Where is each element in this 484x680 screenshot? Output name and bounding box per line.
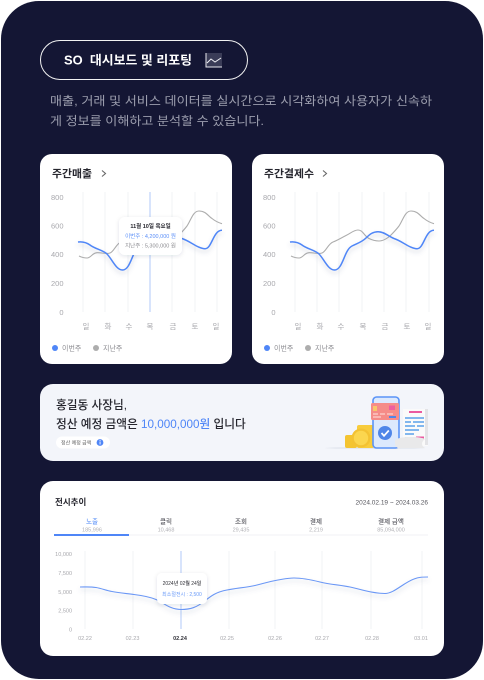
line chart: weekly sales: 토 (192, 322, 199, 331)
banner text: 정산 예정 금액은 10,000,000원 입니다 (56, 417, 246, 431)
line chart: weekly sales: 400 (51, 250, 64, 259)
line chart: weekly sales: 0 (59, 308, 64, 317)
line chart: weekly payments: 일 (295, 322, 302, 331)
metric tabs: 조회 (235, 516, 247, 526)
tooltip: 지난주 : 5,300,000 원 (125, 242, 176, 250)
metric tabs: 185,996 (82, 528, 102, 534)
icon: chevron (323, 170, 326, 176)
line chart: weekly sales: 200 (51, 279, 64, 288)
coins (345, 425, 374, 448)
line chart: weekly sales: 목 (147, 322, 154, 331)
tooltip: 2024년 02월 24일 (163, 580, 202, 587)
line chart: weekly sales: 일 (83, 322, 90, 331)
metric tabs: 클릭 (160, 516, 172, 526)
metric tabs: 2,219 (309, 528, 323, 534)
line chart: weekly payments: 200 (263, 279, 276, 288)
line chart: weekly sales: 600 (51, 222, 64, 230)
line chart: trend: 02.27 (315, 636, 329, 642)
date range: 2024.02.19 ~ 2024.03.26 (356, 500, 428, 506)
tooltip: 11월 10일 목요일 (130, 222, 171, 230)
illustration: phone, card, coins, receipt (325, 397, 428, 449)
info pill: 정산 예정 금액 (61, 440, 92, 446)
line chart: weekly sales: 800 (51, 193, 64, 202)
legend: 지난주 (103, 344, 123, 352)
icon: line chart (206, 53, 222, 67)
panel: weekly payments (252, 154, 444, 364)
line chart: trend: 02.25 (220, 636, 234, 642)
line chart: weekly payments: 일 (425, 322, 432, 331)
icon: chevron (102, 170, 106, 176)
line chart: trend: 0 (69, 628, 72, 634)
line chart: weekly payments: 400 (263, 250, 276, 259)
description text: 매출, 거래 및 서비스 데이터를 실시간으로 시각화하여 사용자가 신속하 (50, 94, 432, 108)
line chart: weekly sales: 화 (105, 322, 112, 331)
line chart: weekly payments: 800 (263, 193, 276, 202)
line chart: weekly sales: 금 (170, 322, 177, 331)
line chart: weekly sales (51, 192, 222, 331)
banner text: 홍길동 사장님, (56, 398, 127, 412)
panel: display trend (40, 481, 444, 656)
line chart: trend: 10,000 (55, 552, 72, 558)
line chart: weekly payments: 목 (360, 322, 367, 331)
legend: 지난주 (315, 344, 335, 352)
tooltip: 최소절전시 : 2,500 (162, 591, 202, 598)
line chart: trend: 02.23 (126, 636, 139, 642)
info pill (56, 436, 110, 448)
metric tabs: 10,468 (158, 528, 174, 534)
line chart: trend (55, 551, 428, 642)
line chart: trend: 02.26 (268, 636, 282, 642)
header pill: SO 대시보드 및 리포팅 (64, 54, 192, 68)
receipt (395, 409, 428, 448)
legend (52, 344, 123, 352)
description text (50, 94, 432, 128)
heading: display trend: 전시추이 (55, 497, 86, 507)
panel: settlement banner (40, 384, 444, 461)
tooltip (157, 573, 207, 604)
credit card (371, 403, 399, 420)
legend (264, 344, 335, 352)
line chart: trend: 02.24 (173, 636, 188, 642)
metric tabs: 노출 (86, 516, 98, 526)
line chart: trend: 02.28 (365, 636, 379, 642)
line chart: trend: 02.22 (78, 636, 92, 642)
legend: 이번주 (62, 344, 82, 352)
line chart: weekly payments: 토 (404, 322, 411, 331)
tooltip: 이번주 : 4,200,000 원 (125, 232, 176, 240)
line chart: weekly payments: 600 (263, 222, 276, 230)
header pill (40, 40, 248, 80)
line chart: weekly payments: 수 (338, 322, 345, 331)
phone (373, 397, 399, 448)
line chart: trend: 2,500 (58, 608, 72, 614)
banner text (56, 398, 246, 431)
line chart: weekly payments (263, 192, 434, 331)
panel: weekly sales (40, 154, 232, 364)
line chart: trend: 03.01 (414, 636, 428, 642)
metric tabs: 결제 금액 (378, 516, 404, 526)
heading: weekly payments: 주간결제수 (264, 167, 314, 180)
line chart: weekly payments: 0 (271, 308, 276, 317)
metric tabs (54, 516, 428, 536)
tooltip (119, 217, 182, 255)
line chart: weekly sales: 일 (213, 322, 220, 331)
description text: 게 정보를 이해하고 분석할 수 있습니다. (50, 114, 264, 128)
legend: 이번주 (274, 344, 294, 352)
line chart: trend: 7,500 (58, 571, 72, 577)
metric tabs: 85,094,000 (377, 528, 405, 534)
line chart: weekly payments: 화 (317, 322, 324, 331)
metric tabs: 29,435 (233, 528, 249, 534)
line chart: weekly payments: 금 (382, 322, 389, 331)
heading: weekly sales: 주간매출 (52, 167, 92, 180)
line chart: weekly sales: 수 (126, 322, 133, 331)
metric tabs: 결제 (310, 518, 322, 526)
line chart: trend: 5,000 (58, 590, 72, 596)
